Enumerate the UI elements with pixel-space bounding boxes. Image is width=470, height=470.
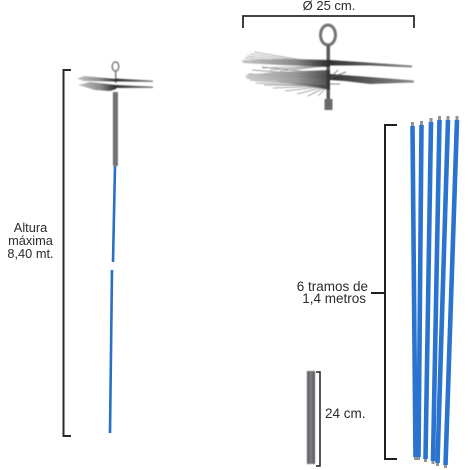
- brush head, small: [77, 62, 153, 91]
- bracket: diameter: [243, 16, 414, 28]
- gray handle section: [307, 371, 315, 464]
- bristles, upper left: [245, 52, 326, 71]
- rod tips: [412, 116, 457, 468]
- foot: [324, 99, 332, 110]
- brush head, enlarged: [242, 25, 414, 110]
- label: handle length: 24 cm.: [325, 406, 366, 421]
- bracket: rods: [385, 125, 397, 459]
- tick to rods label: [371, 292, 385, 294]
- gray handle: [113, 92, 118, 166]
- assembled brush on extended rod: [77, 62, 153, 433]
- blue rod, upper part: [113, 166, 115, 262]
- blue rod, lower part: [110, 270, 112, 433]
- bristles, lower right: [330, 74, 414, 84]
- stem: [326, 45, 330, 103]
- bristles, lower left: [248, 67, 328, 96]
- bracket: handle length: [316, 372, 320, 466]
- label: maximum height: 8,40 mt.: [7, 246, 54, 261]
- label: six rods: 1,4 metros: [302, 291, 366, 306]
- bristles, upper right: [330, 60, 412, 68]
- ring: [320, 25, 336, 45]
- bracket: maximum height: [64, 70, 71, 436]
- label: maximum height: máxima: [8, 233, 54, 248]
- label: maximum height: Altura: [14, 220, 48, 235]
- six blue rods: [412, 116, 457, 468]
- label: six rods: 6 tramos de: [297, 279, 368, 294]
